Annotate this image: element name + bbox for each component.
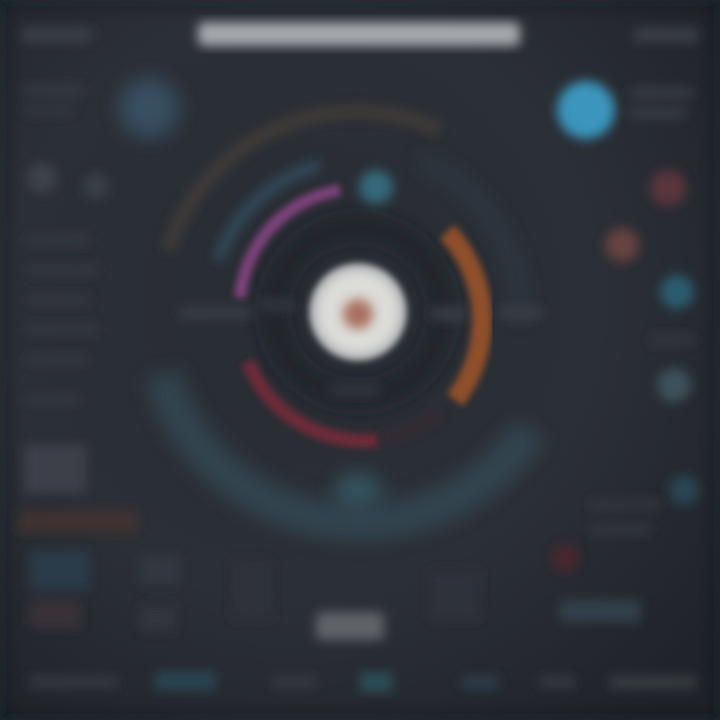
footer row [30, 672, 696, 692]
lower teal node [669, 475, 699, 505]
header left block [22, 28, 92, 42]
title [198, 22, 520, 46]
bottom centre block [316, 612, 384, 640]
blue node [660, 275, 694, 309]
red node [650, 170, 686, 206]
header bar [22, 22, 698, 46]
right column text [560, 335, 694, 622]
bottom teal node [334, 474, 382, 506]
left text lines [28, 235, 98, 404]
teal node at top of ring [359, 170, 393, 204]
outer teal ring [162, 375, 530, 522]
top-right label [630, 88, 692, 118]
left light block [24, 445, 86, 493]
top-left circle [119, 78, 179, 138]
outer brown ring [168, 112, 440, 250]
right column nodes [551, 170, 699, 572]
top-right bright circle [557, 81, 615, 139]
central hub [309, 263, 407, 361]
spoke labels around hub [180, 300, 542, 395]
bottom left cells [30, 550, 90, 590]
red arc [248, 362, 378, 441]
hub core [343, 299, 373, 329]
dark red tail [378, 412, 440, 440]
mid teal ring [218, 165, 320, 260]
left column [18, 85, 138, 532]
purple arc [240, 190, 340, 298]
orange arc [447, 232, 482, 400]
circular chart [162, 112, 530, 522]
bottom grid [30, 550, 480, 640]
slate node [657, 368, 691, 402]
dark red node [551, 544, 579, 572]
orange node [605, 228, 639, 262]
header right block [634, 28, 698, 42]
left header blocks [24, 85, 84, 95]
inner dark ring [273, 227, 443, 397]
right faint ring [420, 160, 520, 320]
red bar [18, 510, 138, 532]
